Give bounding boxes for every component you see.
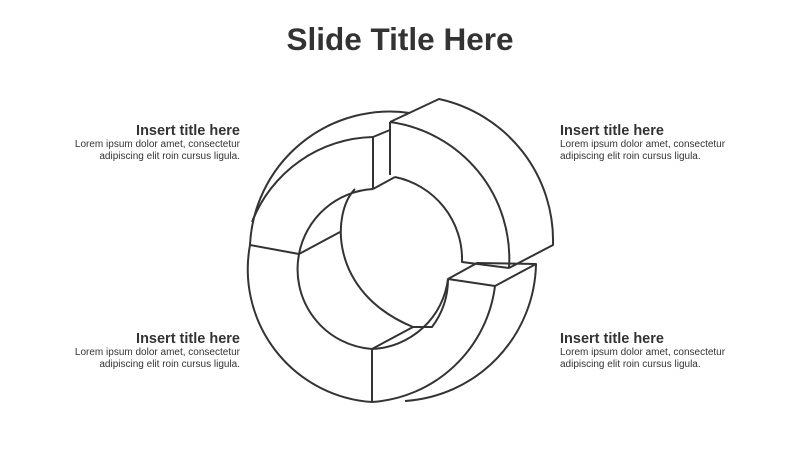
text block: bottom left: adipiscing elit roin cursus ligula. (99, 359, 240, 370)
segment: top left (250, 112, 410, 254)
title: Slide Title Here (286, 21, 514, 57)
text block: top left (75, 123, 240, 162)
inner hole (341, 189, 413, 327)
text block: top right: Lorem ipsum dolor amet, consectetur (560, 139, 725, 150)
text block: bottom left (75, 331, 240, 370)
segment: bottom right (372, 263, 536, 402)
text block: top right: adipiscing elit roin cursus ligula. (560, 151, 701, 162)
text block: bottom right: Insert title here (560, 331, 664, 347)
text block: top left: Lorem ipsum dolor amet, consectetur (75, 139, 240, 150)
segment: top right arrow (390, 99, 553, 268)
text block: bottom left: Lorem ipsum dolor amet, consectetur (75, 347, 240, 358)
text block: bottom right (560, 331, 725, 370)
text block: top left: Insert title here (136, 123, 240, 139)
text block: bottom left: Insert title here (136, 331, 240, 347)
text block: top right (560, 123, 725, 162)
text block: top left: adipiscing elit roin cursus ligula. (99, 151, 240, 162)
text block: top right: Insert title here (560, 123, 664, 139)
text block: bottom right: adipiscing elit roin cursus ligula. (560, 359, 701, 370)
text block: bottom right: Lorem ipsum dolor amet, consectetur (560, 347, 725, 358)
segment: bottom left (248, 245, 372, 402)
